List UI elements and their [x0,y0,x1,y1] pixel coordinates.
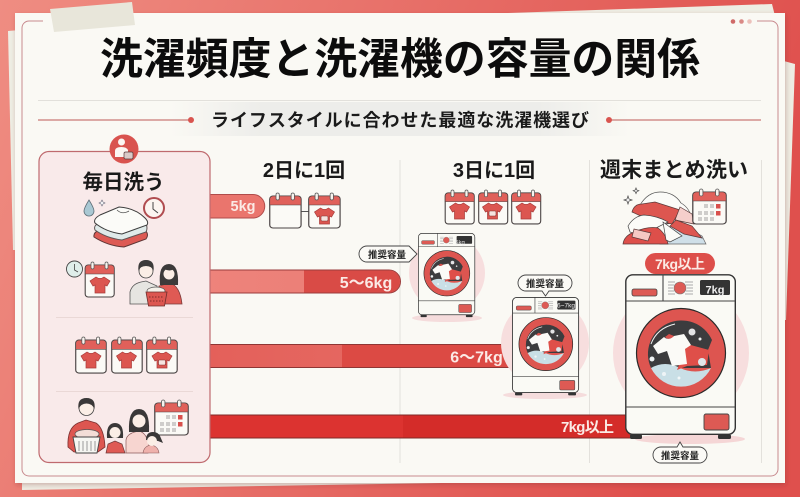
column heading: 3日に1回: 3日に1回 [453,160,535,182]
bar: 5〜6kg: 5〜6kg [340,275,392,292]
bar: 6〜7kg [205,344,512,368]
icon: folded clothes [84,198,164,247]
icon: person with laundry basket [110,134,138,164]
washer: 5kg [409,233,485,322]
washer: 6〜7kg: 6~7kg [557,302,575,310]
bar: 5〜6kg [205,270,400,293]
icon: 3-day calendars [445,190,541,224]
connector between 2-day calendars [298,210,311,212]
callout: 推奨容量 (7kg): 推奨容量 [661,450,699,462]
callout: 推奨容量 (5kg) [359,246,417,262]
badge: 7kg以上 [645,253,715,274]
panel: 毎日洗う [39,134,210,462]
title: 洗濯頻度と洗濯機の容量の関係 [100,36,700,84]
washer: 5kg: 5kg [455,240,465,246]
bar: 5kg: 5kg [230,199,256,215]
column heading: 週末まとめ洗い: 週末まとめ洗い [600,159,748,182]
washer: 7kg [613,275,749,444]
washer: 7kg: 7kg [706,284,724,296]
subtitle [38,102,761,136]
washer: 6〜7kg [501,297,589,399]
bar: 6〜7kg: 6〜7kg [450,350,503,366]
callout: 推奨容量 (6〜7kg) [518,275,572,296]
bar: 7kg以上 [205,415,630,438]
decorative dots [731,19,752,24]
callout: 推奨容量 (6〜7kg): 推奨容量 [526,278,564,290]
callout: 推奨容量 (7kg) [653,442,707,463]
subtitle: ライフスタイルに合わせた最適な洗濯機選び [211,110,589,130]
bar: 5kg [205,194,265,218]
column dividers [400,160,762,463]
icon: laundry pile [623,188,706,244]
row: family and calendar [68,398,188,453]
bar: 7kg以上: 7kg以上 [561,419,614,436]
column heading: 2日に1回: 2日に1回 [263,160,345,182]
callout: 推奨容量 (5kg): 推奨容量 [368,249,406,261]
icon: weekend calendar [693,189,726,224]
row: three calendars [76,337,177,373]
icon: 2-day calendars [270,193,340,228]
badge: 7kg以上: 7kg以上 [655,256,705,272]
tape [50,2,135,32]
row: calendar and couple [66,260,182,306]
panel heading: 毎日洗う [82,171,164,194]
